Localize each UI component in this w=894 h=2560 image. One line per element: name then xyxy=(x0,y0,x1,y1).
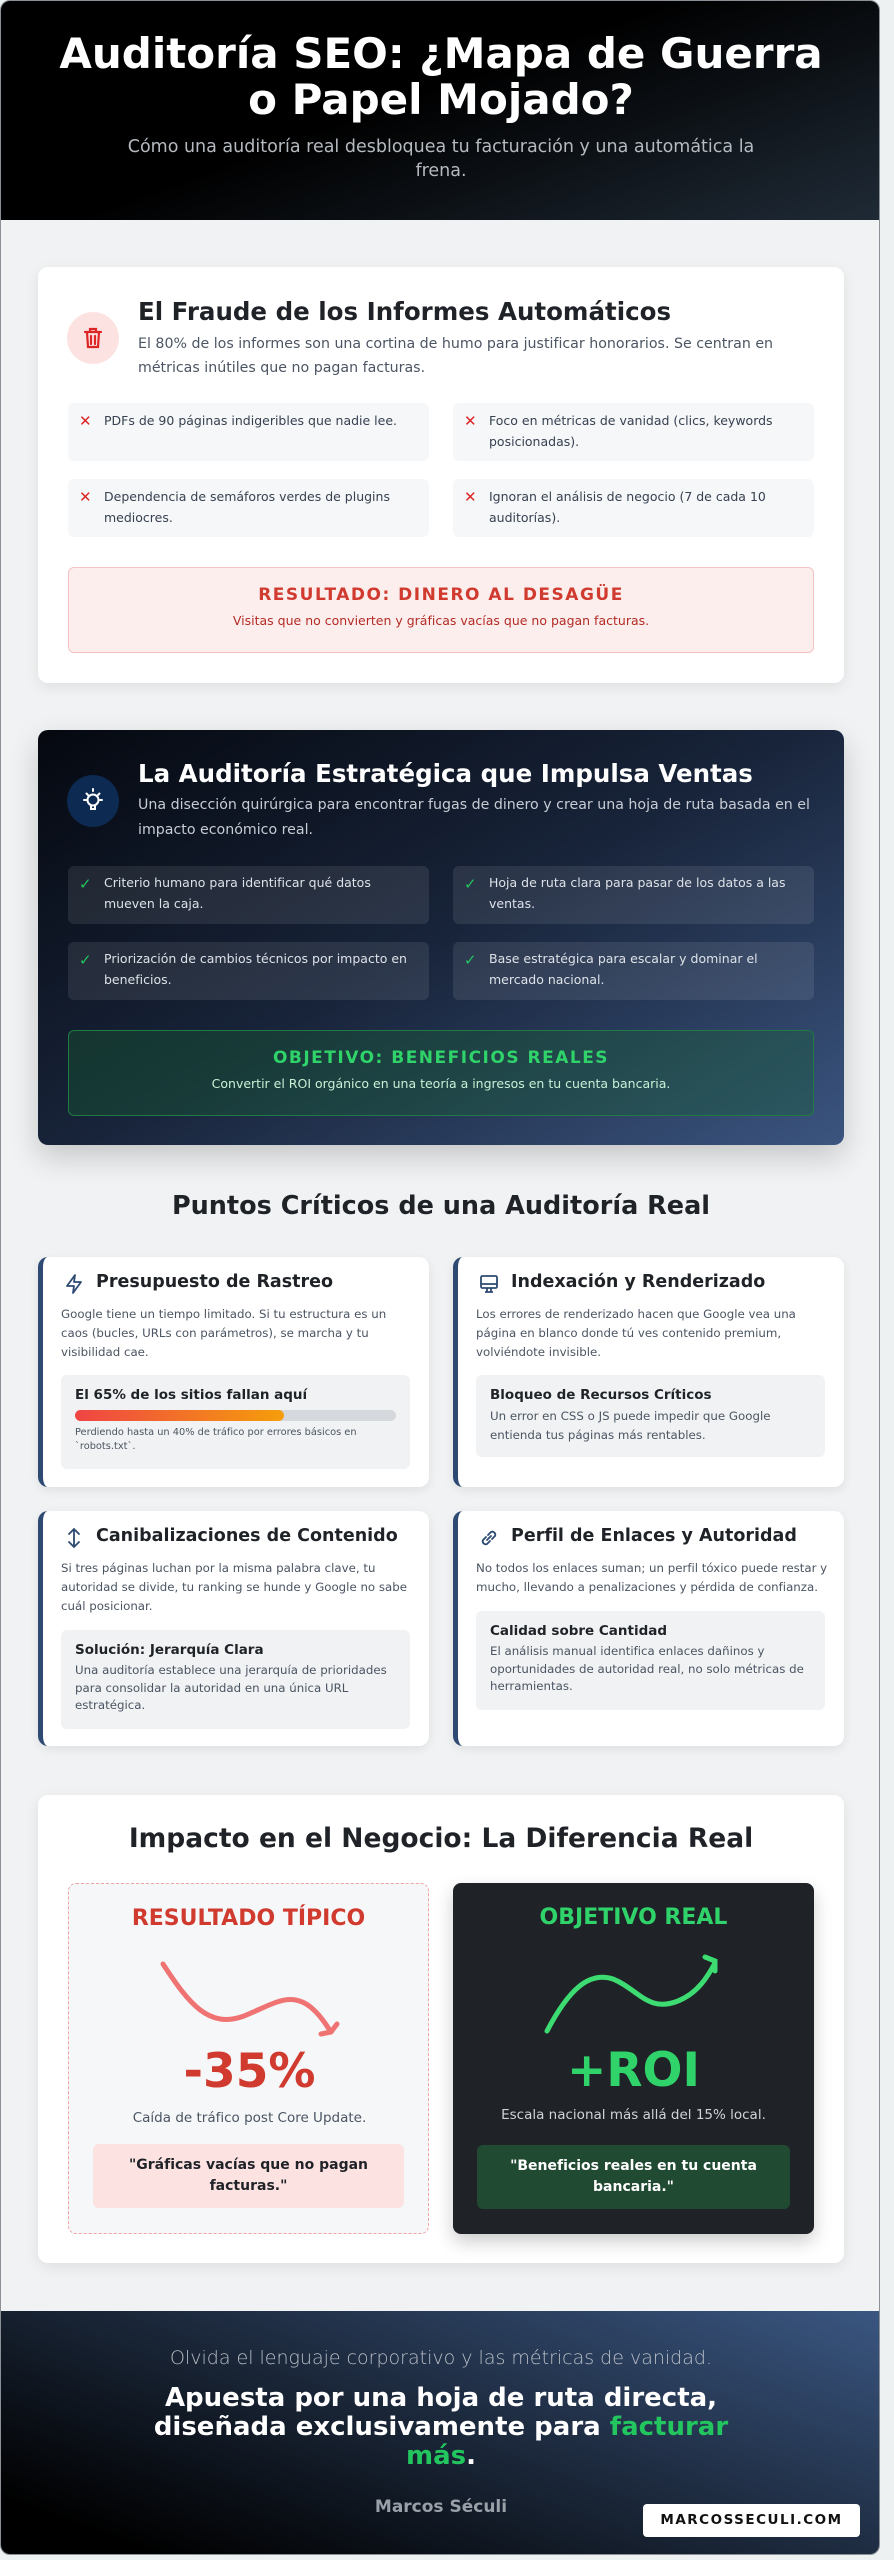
icon: lightning xyxy=(66,1274,82,1294)
callout: objetivo: OBJETIVO: BENEFICIOS REALES xyxy=(273,1048,609,1068)
footer intro: Olvida el lenguaje corporativo y las métricas de vanidad. xyxy=(170,2347,712,2369)
quote xyxy=(477,2145,790,2209)
callout: resultado xyxy=(68,567,814,653)
stat box xyxy=(61,1375,410,1469)
box: resultado típico xyxy=(68,1883,429,2234)
solution box xyxy=(61,1630,410,1729)
item 1 xyxy=(68,866,429,924)
item 1: PDFs de 90 páginas indigeribles que nadie lee. xyxy=(104,413,397,428)
title: o Papel Mojado? xyxy=(248,75,634,124)
quote: "Gráficas vacías que no pagan facturas." xyxy=(129,2157,368,2194)
panel: perfil de enlaces xyxy=(453,1511,844,1746)
section heading: puntos críticos: Puntos Críticos de una Auditoría Real xyxy=(172,1191,710,1221)
callout: resultado: RESULTADO: DINERO AL DESAGÜE xyxy=(258,585,624,605)
icon: monitor xyxy=(480,1275,498,1293)
heading: El Fraude de los Informes Automáticos xyxy=(138,297,671,326)
item 3: Dependencia de semáforos verdes de plugins mediocres. xyxy=(104,489,390,525)
item 1 xyxy=(68,403,429,461)
item 3 xyxy=(68,942,429,1000)
stat box: Perdiendo hasta un 40% de tráfico por errores básicos en `robots.txt`. xyxy=(75,1427,357,1452)
box: objetivo real xyxy=(453,1883,814,2234)
quote xyxy=(93,2144,404,2208)
author: Marcos Séculi xyxy=(375,2497,507,2517)
quote: "Beneficios reales en tu cuenta bancaria." xyxy=(510,2158,757,2195)
stat box: El 65% de los sitios fallan aquí xyxy=(75,1387,307,1403)
item 3: Priorización de cambios técnicos por impacto en beneficios. xyxy=(104,951,407,987)
item 2: Hoja de ruta clara para pasar de los datos a las ventas. xyxy=(489,875,785,911)
solution box: Solución: Jerarquía Clara xyxy=(75,1642,264,1658)
info box xyxy=(476,1611,825,1710)
label: OBJETIVO REAL xyxy=(540,1905,727,1930)
info box: Un error en CSS o JS puede impedir que Google entienda tus páginas más rentables. xyxy=(490,1409,770,1442)
title: Auditoría SEO: ¿Mapa de Guerra xyxy=(59,29,823,78)
chart: up curve xyxy=(544,1954,718,2034)
caption: Caída de tráfico post Core Update. xyxy=(133,2110,366,2126)
panel: indexación y renderizado xyxy=(453,1257,844,1487)
item 1: ✕ xyxy=(79,412,92,430)
caption: Escala nacional más allá del 15% local. xyxy=(501,2107,766,2123)
info box: Calidad sobre Cantidad xyxy=(490,1623,667,1639)
item 4: ✕ xyxy=(464,488,477,506)
solution box: Una auditoría establece una jerarquía de prioridades para consolidar la autoridad en una única URL estratégica. xyxy=(75,1663,387,1712)
heading: Impacto en el Negocio: La Diferencia Real xyxy=(129,1823,753,1854)
chart: down curve xyxy=(160,1962,340,2036)
item 2: Foco en métricas de vanidad (clics, keywords posicionadas). xyxy=(489,413,773,449)
stat: -35% xyxy=(183,2044,316,2099)
callout: objetivo: Convertir el ROI orgánico en una teoría a ingresos en tu cuenta bancaria. xyxy=(212,1076,670,1091)
icon: trash xyxy=(67,312,119,364)
item 3 xyxy=(68,479,429,537)
icon: link xyxy=(482,1530,496,1546)
item 2 xyxy=(453,866,814,924)
item 4: Ignoran el análisis de negocio (7 de cada 10 auditorías). xyxy=(489,489,766,525)
list items xyxy=(68,403,814,537)
item 1: ✓ xyxy=(79,875,92,893)
item 4: ✓ xyxy=(464,951,477,969)
item 2: ✓ xyxy=(464,875,477,893)
item 4 xyxy=(453,479,814,537)
label: RESULTADO TÍPICO xyxy=(132,1906,365,1931)
website badge xyxy=(643,2504,860,2537)
info box: Bloqueo de Recursos Críticos xyxy=(490,1387,712,1403)
text: Si tres páginas luchan por la misma palabra clave, tu autoridad se divide, tu ranking se hunde y Google no sabe cuál posicionar. xyxy=(61,1561,407,1613)
item 4 xyxy=(453,942,814,1000)
panel: canibalizaciones xyxy=(38,1511,429,1746)
title: Indexación y Renderizado xyxy=(511,1272,765,1292)
info box: El análisis manual identifica enlaces dañinos y oportunidades de autoridad real, no solo métricas de herramientas. xyxy=(490,1644,804,1693)
text: Los errores de renderizado hacen que Google vea una página en blanco donde tú ves contenido premium, volviéndote invisible. xyxy=(476,1307,796,1359)
description: El 80% de los informes son una cortina de humo para justificar honorarios. Se centran en métricas inútiles que no pagan facturas. xyxy=(138,336,773,376)
title xyxy=(59,29,823,124)
title: Perfil de Enlaces y Autoridad xyxy=(511,1526,797,1546)
callout: resultado: Visitas que no convierten y gráficas vacías que no pagan facturas. xyxy=(233,613,649,628)
title: Canibalizaciones de Contenido xyxy=(96,1526,398,1546)
header xyxy=(1,1,881,220)
item 4: Base estratégica para escalar y dominar el mercado nacional. xyxy=(489,951,758,987)
callout: objetivo xyxy=(68,1030,814,1116)
panel: fraude informes automáticos xyxy=(38,267,844,683)
item 3: ✕ xyxy=(79,488,92,506)
text: Google tiene un tiempo limitado. Si tu estructura es un caos (bucles, URLs con parámetros), se marcha y tu visibilidad cae. xyxy=(61,1307,386,1359)
title: Presupuesto de Rastreo xyxy=(96,1272,333,1292)
panel: impacto en el negocio xyxy=(38,1795,844,2263)
panel: auditoría estratégica xyxy=(38,730,844,1145)
icon: lightbulb xyxy=(67,775,119,827)
description: Una disección quirúrgica para encontrar fugas de dinero y crear una hoja de ruta basada en el impacto económico real. xyxy=(138,797,810,838)
list items xyxy=(68,866,814,1000)
website badge: MARCOSSECULI.COM xyxy=(660,2512,843,2528)
panel: presupuesto de rastreo xyxy=(38,1257,429,1487)
item 2: ✕ xyxy=(464,412,477,430)
item 2 xyxy=(453,403,814,461)
stat: +ROI xyxy=(567,2043,700,2098)
item 3: ✓ xyxy=(79,951,92,969)
footer headline: Apuesta por una hoja de ruta directa, diseñada exclusivamente para facturar más. xyxy=(154,2383,728,2471)
info box xyxy=(476,1375,825,1457)
icon: up-down arrows xyxy=(68,1528,80,1548)
heading: La Auditoría Estratégica que Impulsa Ventas xyxy=(138,759,753,788)
footer xyxy=(1,2311,881,2556)
text: No todos los enlaces suman; un perfil tóxico puede restar y mucho, llevando a penalizaciones y pérdida de confianza. xyxy=(476,1561,827,1594)
item 1: Criterio humano para identificar qué datos mueven la caja. xyxy=(104,875,371,911)
subtitle: Cómo una auditoría real desbloquea tu facturación y una automática la frena. xyxy=(128,137,754,181)
